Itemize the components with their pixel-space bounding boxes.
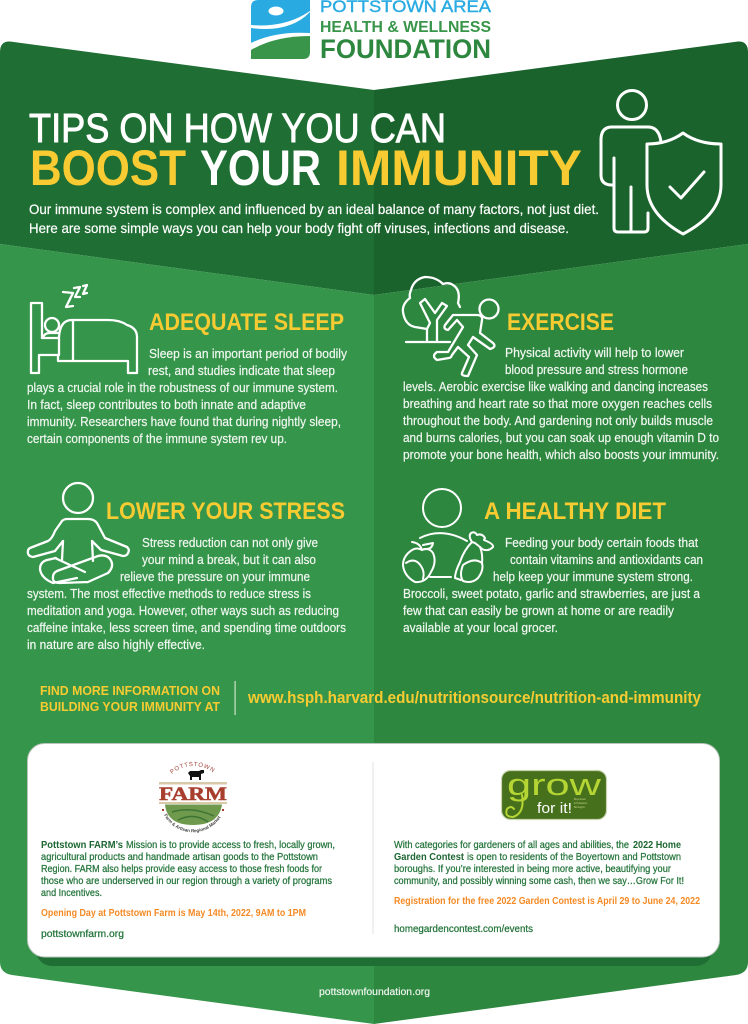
icon: person with fruit and carrot	[403, 489, 493, 582]
body text: and burns calories, but you can soak up enough vitamin D to	[403, 430, 719, 445]
body text: relieve the pressure on your immune	[120, 569, 310, 584]
title: TIPS ON HOW YOU CAN	[29, 105, 446, 151]
body text	[27, 535, 346, 652]
logo: Pottstown Area Health & Wellness Foundation	[251, 0, 492, 64]
body text: Sleep is an important period of bodily	[149, 346, 347, 361]
body text: system. The most effective methods to reduce stress is	[27, 586, 311, 601]
body text	[403, 535, 703, 635]
logo: Grow For It: grow	[507, 767, 602, 802]
body text: blood pressure and stress hormone	[505, 362, 688, 377]
logo: Grow For It: Boyertown	[574, 798, 586, 801]
text: Pottstown Farm: Pottstown FARM’s	[41, 840, 123, 851]
body text: caffeine intake, less screen time, and spending time outdoors	[27, 620, 346, 635]
text: Home Garden Contest: Garden Contest	[394, 852, 465, 863]
logo: Grow For It: & Pottstown	[574, 802, 588, 805]
body text: throughout the body. And gardening not only builds muscle	[403, 413, 713, 428]
logo: Pottstown Farm: FARM	[159, 784, 227, 805]
icon: sleeping in bed	[31, 285, 137, 373]
body text: Physical activity will help to lower	[505, 345, 685, 360]
more information link: BUILDING YOUR IMMUNITY AT	[40, 699, 220, 714]
body text: promote your bone health, which also boosts your immunity.	[403, 447, 719, 462]
body text: plays a crucial role in the robustness of our immune system.	[27, 380, 338, 395]
logo: Grow For It: for it!	[537, 800, 572, 817]
title: BOOST	[30, 140, 186, 196]
body text: help keep your immune system strong.	[493, 569, 693, 584]
text: Home Garden Contest	[394, 840, 700, 935]
body text: Broccoli, sweet potato, garlic and strawberries, are just a	[403, 586, 701, 601]
body text: meditation and yoga. However, other ways such as reducing	[27, 603, 339, 618]
text: Pottstown Farm	[41, 840, 335, 940]
text: Pottstown Farm: pottstownfarm.org	[41, 929, 124, 940]
panel: adequate sleep	[27, 285, 347, 446]
logo text	[320, 0, 492, 64]
heading: LOWER YOUR STRESS	[106, 498, 345, 525]
card: partner programs	[27, 743, 720, 966]
heading: EXERCISE	[507, 309, 614, 336]
body text: levels. Aerobic exercise like walking and dancing increases	[403, 379, 708, 394]
text: Home Garden Contest: is open to residents of the Boyertown and Pottstown	[467, 852, 681, 863]
body text: Stress reduction can not only give	[142, 535, 318, 550]
heading: A HEALTHY DIET	[484, 498, 666, 525]
body text: Feeding your body certain foods that	[505, 535, 698, 550]
more information link	[40, 681, 701, 715]
logo: Pottstown Farm: Farm & Artisan Regional Market	[164, 814, 221, 833]
body text	[403, 345, 719, 462]
text: Pottstown Farm: Mission is to provide access to fresh, locally grown,	[126, 840, 335, 851]
text: Pottstown Farm: and Incentives.	[41, 888, 102, 899]
text: Home Garden Contest: With categories for gardeners of all ages and abilities, the	[394, 840, 629, 851]
panel: exercise	[403, 277, 719, 462]
text: Home Garden Contest: community, and possibly winning some cash, then we say…Grow For It!	[394, 876, 684, 887]
panel: a healthy diet	[403, 489, 703, 635]
logo text: FOUNDATION	[320, 34, 491, 64]
logo: Grow For It: Boroughs	[574, 806, 585, 809]
more information link: FIND MORE INFORMATION ON	[40, 683, 220, 698]
body text: immunity. Researchers have found that during nightly sleep,	[27, 414, 341, 429]
icon: meditating person	[28, 483, 129, 583]
body text: certain components of the immune system rev up.	[27, 431, 287, 446]
body text	[27, 346, 347, 446]
logo: Pottstown Farm: POTTSTOWN	[170, 762, 215, 774]
body text: breathing and heart rate so that more oxygen reaches cells	[403, 396, 712, 411]
title: IMMUNITY	[336, 140, 582, 196]
body text: in nature are also highly effective.	[27, 637, 205, 652]
text: Pottstown Farm: Region. FARM also helps provide easy access to those fresh foods for	[41, 864, 323, 875]
intro text: Here are some simple ways you can help your body fight off viruses, infections and disease.	[29, 220, 569, 236]
intro text	[29, 201, 599, 236]
logo: Grow For It	[502, 767, 606, 820]
logo mark	[251, 0, 310, 59]
logo: Pottstown Farm	[159, 762, 227, 833]
text: Home Garden Contest: boroughs. If you’re interested in being more active, beautifying your	[394, 864, 672, 875]
body text: few that can easily be grown at home or are readily	[403, 603, 674, 618]
more information link: www.hsph.harvard.edu/nutritionsource/nutrition-and-immunity	[247, 688, 701, 707]
text: Pottstown Farm: those who are underserved in our region through a variety of programs	[41, 876, 332, 887]
text: Home Garden Contest: 2022 Home	[633, 840, 681, 851]
body text: contain vitamins and antioxidants can	[510, 552, 703, 567]
title: YOUR	[200, 140, 321, 196]
title	[29, 105, 582, 196]
text: Pottstown Farm: agricultural products and handmade artisan goods to the Pottstown	[41, 852, 318, 863]
icon: person with shield	[601, 90, 721, 234]
footer url: pottstownfoundation.org	[319, 987, 430, 998]
body text: In fact, sleep contributes to both innate and adaptive	[27, 397, 306, 412]
intro text: Our immune system is complex and influenced by an ideal balance of many factors, not just diet.	[29, 201, 599, 217]
text: Home Garden Contest: Registration for the free 2022 Garden Contest is April 29 to June 24, 2022	[394, 896, 700, 907]
body text: rest, and studies indicate that sleep	[148, 363, 335, 378]
body text: your mind a break, but it can also	[142, 552, 316, 567]
panel: lower your stress	[27, 483, 346, 652]
body text: available at your local grocer.	[403, 620, 558, 635]
text: Pottstown Farm: Opening Day at Pottstown Farm is May 14th, 2022, 9AM to 1PM	[41, 908, 306, 919]
logo text: HEALTH & WELLNESS	[320, 19, 491, 36]
heading: ADEQUATE SLEEP	[149, 309, 344, 336]
icon: tree and runner	[403, 277, 498, 376]
text: Home Garden Contest: homegardencontest.com/events	[394, 924, 533, 935]
